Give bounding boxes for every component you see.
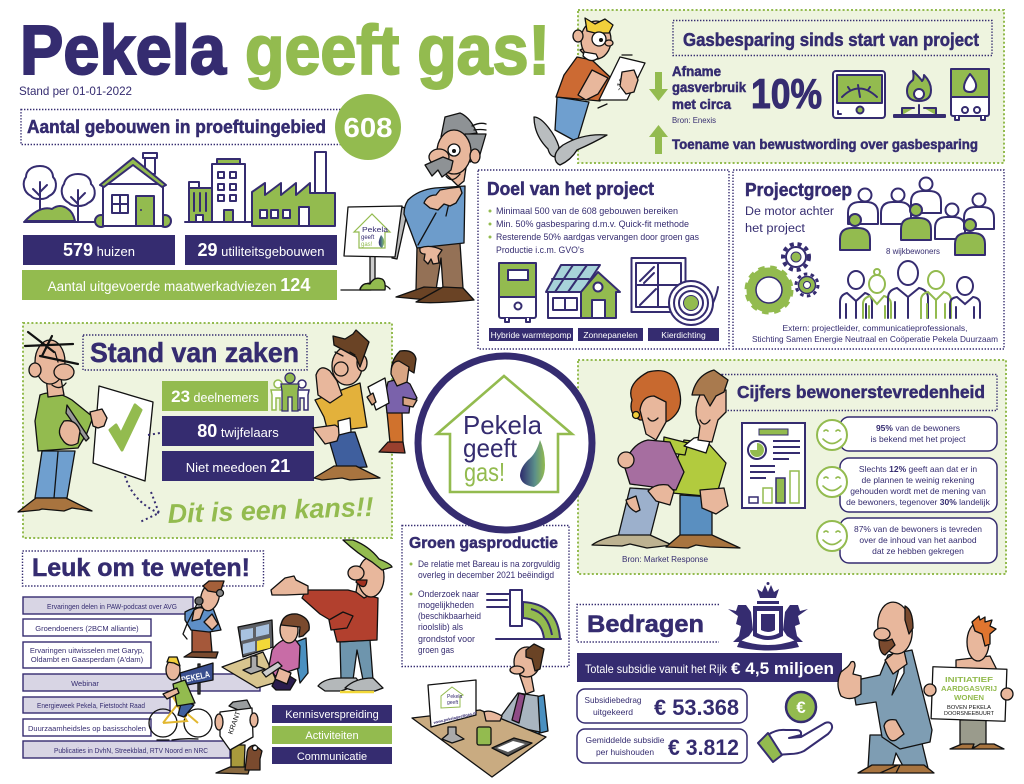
illustration: man with sign: BOVEN PEKELA [947, 705, 992, 711]
caption: extern: Stichting Samen Energie Neutraal en Coöperatie Pekela Duurzaam [752, 334, 998, 344]
bullet 2: (beschikbaarheid [418, 611, 481, 622]
source: Enexis: Bron: Enexis [672, 116, 716, 125]
icon: factory buildings [185, 152, 335, 226]
bar: 80 twijfelaars: 80 twijfelaars [197, 421, 279, 441]
illustration: cap man gesturing [271, 540, 392, 692]
illustration: farmer with sign: gas! [361, 242, 373, 248]
icon: smiley 3 [817, 521, 847, 551]
bullet list: doelen: Min. 50% gasbesparing d.m.v. Quick-fit methode [496, 219, 689, 230]
bullet 2: Onderzoek naar [418, 589, 479, 600]
illustration: man reading meter sheet: -10% [613, 69, 631, 92]
panel: leuk om te weten [22, 551, 392, 764]
illustration: farmer with sign: geeft [361, 235, 375, 241]
text: de motor: De motor achter [745, 206, 834, 218]
heading: gasbesparing [673, 20, 992, 56]
callout: 87 percent: dat ze hebben gekregen [872, 546, 964, 556]
callout: 12 percent: Slechts 12% geeft aan dat er in [859, 464, 977, 474]
legend: communicatie [272, 747, 392, 764]
illustration: man with thumbs up [838, 600, 934, 773]
bar: totale subsidie: € 4,5 miljoen [731, 659, 834, 678]
arrow: dotted link to bars [148, 433, 160, 435]
callout: subsidiebedrag: uitgekeerd [593, 707, 633, 717]
illustration: newspaper reader and dog: KRANT [228, 710, 243, 735]
panel: gasbesparing [578, 10, 1004, 163]
icon: trees and house [24, 153, 171, 227]
label: kierdichting [648, 328, 719, 341]
callout: gemiddelde subsidie: Gemiddelde subsidie [586, 735, 665, 745]
icon: flame [520, 440, 545, 487]
title: Pekela [20, 11, 227, 89]
bullet 1 [410, 559, 560, 581]
list item: publicaties [23, 741, 230, 758]
heading: bedragen [577, 604, 719, 642]
arrow down [649, 72, 668, 101]
list item: duurzaamheidsles [23, 719, 151, 736]
list item: podcast [23, 597, 193, 614]
caption: extern [752, 323, 998, 344]
bar: maatwerkadviezen: Aantal uitgevoerde maatwerkadviezen 124 [48, 275, 310, 295]
bar: maatwerkadviezen [22, 270, 337, 300]
illustration: man with checklist [18, 332, 153, 512]
list item: duurzaamheidsles: Duurzaamheidsles op basisscholen [28, 724, 146, 733]
bar: 80 twijfelaars [162, 416, 314, 446]
list item: podcast: Ervaringen delen in PAW-podcast over AVG [47, 602, 177, 611]
panel: groen gasproductie [402, 526, 569, 666]
icon: gears [748, 244, 818, 311]
source: market response: Bron: Market Response [622, 554, 708, 564]
date line: Stand per 01-01-2022 [19, 84, 132, 98]
arrow: dotted to kans [125, 476, 159, 522]
text: de motor [745, 206, 834, 235]
illustration: man at desk [412, 644, 548, 777]
illustration: newspaper reader and dog [215, 700, 262, 774]
illustration: man at desk: Pekela [447, 694, 463, 700]
heading: aantal gebouwen: Aantal gebouwen in proeftuingebied [27, 117, 326, 137]
bullet 1: De relatie met Bareau is na zorgvuldig [418, 559, 560, 570]
handwritten slogan: Dit is een kans!! [167, 492, 374, 529]
text: toename bewustwording: Toename van bewustwording over gasbesparing [672, 136, 978, 152]
callout: 95 percent: 95% van de bewoners [876, 423, 960, 433]
title [20, 11, 550, 89]
list item: groendoeners [23, 619, 151, 636]
heading: projectgroep: Projectgroep [745, 180, 852, 200]
icon: gas burner [894, 71, 945, 117]
illustration: podcast host [183, 581, 224, 658]
illustration: man at desk: geeft [447, 700, 459, 706]
list item: ervaringen uitwisselen [23, 642, 151, 668]
heading: cijfers: Cijfers bewonerstevredenheid [737, 382, 985, 402]
icon: boiler [951, 69, 989, 120]
icon: gas meter [833, 71, 885, 118]
icon: house with solar panels [546, 265, 620, 318]
legend: kennisverspreiding: Kennisverspreiding [285, 709, 379, 721]
illustration: woman at video call [222, 614, 309, 690]
callout: 12 percent: de bewoners, tegenover 30% landelijk [846, 497, 991, 507]
bar: niet meedoen 21 [162, 451, 314, 481]
icon: three people [271, 373, 309, 411]
title: geeft gas! [245, 11, 550, 89]
text: afname gasverbruik: gasverbruik [672, 80, 746, 95]
legend: activiteiten: Activiteiten [305, 730, 359, 742]
heading: cijfers [722, 374, 997, 410]
label: zonnepanelen: Zonnepanelen [583, 330, 638, 340]
bar: 23 deelnemers: 23 deelnemers [171, 387, 259, 406]
list item: webinar: Webinar [71, 679, 99, 688]
icon: hybrid heat pump [499, 263, 536, 322]
panel: projectgroep [733, 170, 1004, 349]
callout: 12 percent: gehouden wordt met de mening van [850, 486, 986, 496]
label: zonnepanelen [578, 328, 643, 341]
callout: 12 percent: de plannen te weinig rekening [862, 475, 975, 485]
panel: doel van het project [478, 170, 729, 349]
illustration: doubtful man [313, 330, 380, 480]
callout: 87 percent [840, 518, 997, 563]
logo wordmark: Pekela [463, 410, 543, 440]
callout: subsidiebedrag [577, 689, 747, 723]
list item: publicaties: Publicaties in DvhN, Streekblad, RTV Noord en NRC [54, 746, 209, 755]
bullet 2: mogelijkheden [418, 600, 474, 611]
text: de motor: het project [745, 223, 806, 235]
panel: logo circle [418, 356, 592, 530]
text: afname gasverbruik: met circa [672, 97, 731, 112]
icon: report [742, 423, 805, 508]
icon: coat of arms [728, 582, 808, 650]
callout: gemiddelde subsidie [577, 729, 747, 763]
icon: hand with euro: € [796, 698, 806, 717]
icon: eight residents [840, 178, 994, 255]
legend: kennisverspreiding [272, 705, 392, 723]
illustration: man with sign: INITIATIEF [945, 675, 994, 684]
bar: 29 utiliteitsgebouwen: 29 utiliteitsgebouwen [198, 240, 324, 260]
bullet list: doelen: Minimaal 500 van de 608 gebouwen bereiken [496, 206, 678, 217]
bullet 1: overleg in december 2021 beëindigd [418, 570, 554, 581]
icon: window and draught strip roll [632, 258, 718, 325]
callout: subsidiebedrag: Subsidiebedrag [584, 695, 642, 705]
badge 608 [335, 94, 401, 160]
arrow up [649, 125, 668, 154]
label: hybride warmtepomp: Hybride warmtepomp [491, 330, 572, 340]
caption: wijkbewoners: 8 wijkbewoners [886, 247, 940, 256]
icon: external team [840, 261, 980, 318]
panel: bedragen [577, 582, 842, 763]
illustration: farmer with sign [341, 113, 486, 303]
logo house outline [437, 376, 572, 492]
panel: aantal gebouwen [21, 94, 401, 300]
panel: cijfers bewonerstevredenheid [578, 360, 1006, 574]
list item: energieweek: Energieweek Pekela, Fietstocht Raad [37, 701, 145, 710]
caption: extern: Extern: projectleider, communicatieprofessionals, [782, 323, 968, 333]
callout: 12 percent [840, 458, 997, 512]
logo wordmark: geeft [463, 433, 518, 463]
icon: smiley 1 [817, 420, 847, 450]
bullet 2: rioolslib) als [418, 622, 463, 633]
bar: totale subsidie [577, 653, 842, 682]
illustration: man reading meter sheet [534, 18, 645, 165]
callout: 95 percent: is bekend met het project [871, 434, 966, 444]
text: afname gasverbruik [672, 64, 746, 112]
heading: bedragen: Bedragen [587, 611, 704, 638]
legend: communicatie: Communicatie [297, 751, 367, 763]
icon: biogas pipe [487, 590, 561, 639]
heading: leuk om te weten: Leuk om te weten! [32, 554, 250, 582]
illustration: man with sign [924, 616, 1013, 749]
list item: groendoeners: Groendoeners (2BCM alliantie) [35, 624, 139, 633]
panel: stand van zaken [18, 323, 417, 538]
list item: ervaringen uitwisselen: Oldambt en Gaasperdam (A'dam) [31, 655, 144, 664]
list item: energieweek [23, 697, 170, 713]
illustration: couple [592, 370, 740, 548]
callout: 87 percent: over de inhoud van het aanbod [859, 535, 977, 545]
bullet list: doelen: Resterende 50% aardgas vervangen door groen gas [496, 232, 699, 243]
illustration: farmer with sign: Pekela [362, 227, 388, 234]
illustration: cyclist with sign [149, 657, 213, 740]
illustration: man with sign: DOORSNEEBUURT [944, 711, 994, 717]
label: kierdichting: Kierdichting [661, 330, 706, 340]
bar: niet meedoen 21: Niet meedoen 21 [186, 456, 290, 476]
illustration: man with sign: AARDGASVRIJ [941, 684, 997, 693]
heading: aantal gebouwen [21, 110, 345, 144]
heading: groen gasproductie: Groen gasproductie [409, 535, 558, 552]
bullet list: doelen: Productie i.c.m. GVO's [496, 245, 584, 256]
callout: gemiddelde subsidie: per huishouden [596, 747, 654, 757]
bar: 29 utiliteitsgebouwen [185, 235, 337, 265]
bar: 579 huizen [23, 235, 175, 265]
bullet list: doelen [488, 206, 699, 256]
bullet 2: grondstof voor [418, 634, 475, 645]
icon: smiley 2 [817, 467, 847, 497]
callout: 95 percent [840, 417, 997, 451]
heading: gasbesparing: Gasbesparing sinds start van project [683, 30, 979, 50]
list item: ervaringen uitwisselen: Ervaringen uitwisselen met Garyp, [30, 646, 144, 655]
badge 608: 608 [344, 112, 392, 143]
logo wordmark [463, 410, 543, 487]
logo wordmark: gas! [464, 457, 505, 487]
icon: hand with euro [758, 692, 832, 762]
text: afname gasverbruik: Afname [672, 64, 721, 79]
illustration: man at desk: www.pekelageeftgas.nl [432, 710, 477, 725]
callout: subsidiebedrag: € 53.368 [654, 695, 739, 720]
callout: 87 percent: 87% van de bewoners is tevreden [854, 524, 982, 534]
bullet 2 [410, 589, 481, 656]
bar: 579 huizen: 579 huizen [63, 240, 135, 260]
bar: 23 deelnemers [162, 381, 268, 411]
number: 10 procent: 10% [751, 70, 822, 117]
illustration: woman with paper [367, 351, 417, 453]
callout: gemiddelde subsidie: € 3.812 [668, 735, 739, 760]
heading: doel: Doel van het project [487, 179, 654, 199]
bullet 2: groen gas [418, 645, 454, 656]
illustration: cyclist with sign: PEKELA [180, 669, 211, 685]
heading: stand van zaken: Stand van zaken [90, 337, 299, 368]
legend: activiteiten [272, 726, 392, 744]
list item: webinar [23, 674, 260, 691]
illustration: man with sign: WONEN [954, 693, 984, 702]
bar: totale subsidie: Totale subsidie vanuit het Rijk [585, 662, 728, 676]
